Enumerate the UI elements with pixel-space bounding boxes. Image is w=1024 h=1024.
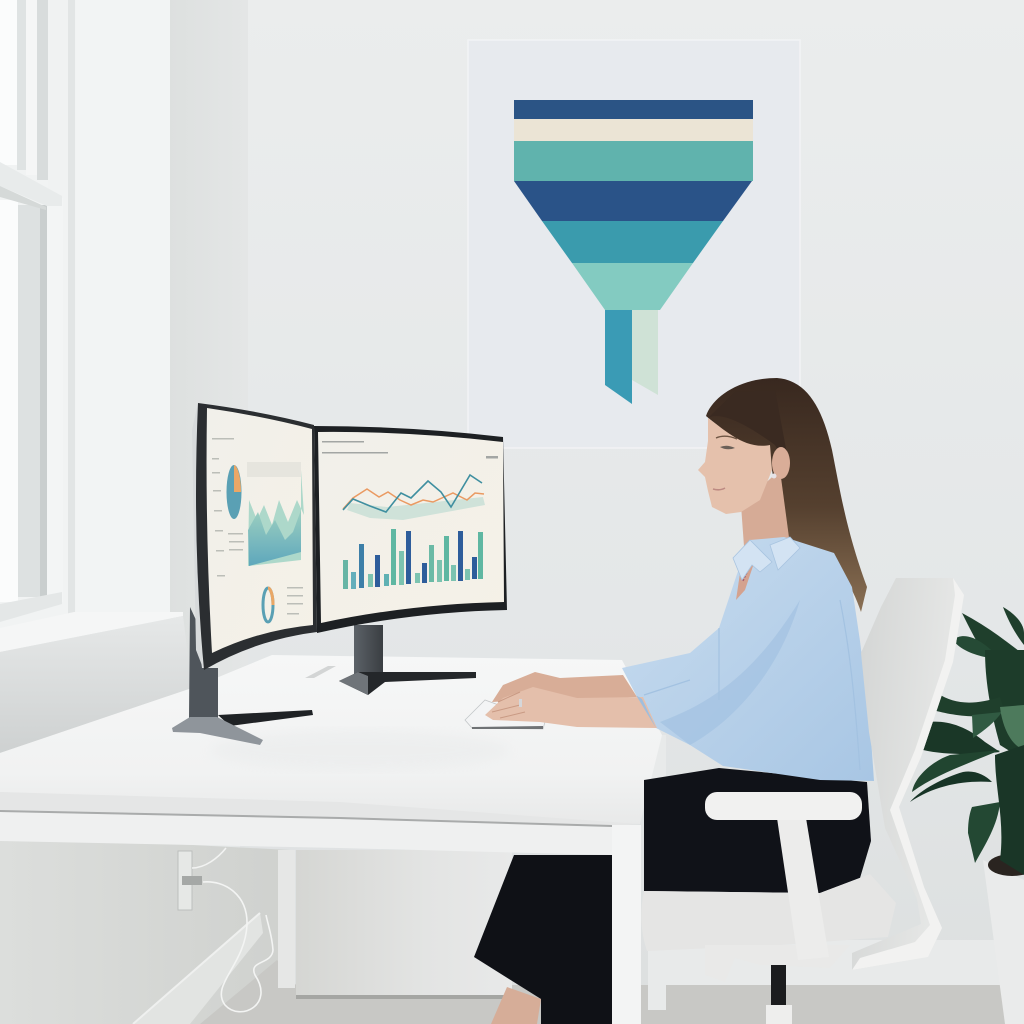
desk note strip	[305, 666, 336, 678]
wall art: funnel poster	[468, 40, 800, 448]
funnel stripe 6	[572, 263, 693, 310]
floor	[200, 960, 1024, 1024]
wall under sill	[0, 616, 192, 753]
bar chart	[343, 529, 483, 589]
window sill	[0, 612, 183, 652]
desk shadow under monitors	[210, 730, 510, 770]
right monitor stand	[339, 625, 476, 695]
plant leaves	[910, 607, 1024, 875]
teal line series	[343, 475, 482, 512]
line chart area	[347, 497, 485, 520]
baseboard	[133, 913, 1000, 1024]
desk back leg	[648, 735, 666, 1010]
funnel stem right	[632, 310, 658, 395]
armrest pad	[705, 792, 862, 820]
left monitor	[172, 403, 317, 745]
eye, brow and mouth	[713, 436, 737, 490]
ankle	[491, 987, 541, 1024]
ear	[772, 447, 790, 479]
shirt neckline and necklace	[736, 553, 755, 600]
back wall	[240, 0, 1024, 1024]
funnel stripe 3	[514, 141, 753, 181]
face	[698, 418, 772, 514]
keyboard	[465, 700, 545, 729]
donut chart	[263, 588, 273, 622]
chair back rim	[852, 578, 964, 970]
hair sweep at temple	[708, 390, 790, 470]
chart header	[247, 462, 301, 477]
left monitor bezel	[196, 403, 317, 670]
chair	[641, 578, 964, 1024]
wall below desk	[0, 835, 290, 1024]
far forearm and hand	[492, 672, 637, 702]
trousers lower leg	[474, 855, 612, 1024]
funnel stripe 1	[514, 100, 753, 119]
funnel stripe 5	[542, 221, 723, 263]
neck	[741, 470, 790, 560]
shirt body	[622, 537, 874, 781]
trousers seated	[644, 768, 871, 893]
earring	[772, 474, 776, 478]
left monitor back edge	[192, 403, 203, 668]
right monitor	[314, 426, 507, 695]
woman	[465, 378, 874, 1024]
left wall corner	[168, 0, 248, 700]
funnel stem left	[605, 310, 632, 404]
cabinet under desk	[278, 850, 512, 999]
orange line series	[343, 489, 484, 509]
hair back	[706, 378, 867, 612]
chair seat	[641, 874, 896, 951]
wall outlet and cable	[178, 848, 273, 1012]
desk top	[0, 655, 662, 824]
finger lines	[492, 692, 525, 718]
right monitor bezel	[314, 426, 507, 633]
left monitor screen	[207, 408, 313, 653]
ring	[519, 699, 522, 707]
window reveal	[72, 0, 170, 625]
left screen sidebar	[212, 438, 303, 614]
pie chart	[226, 465, 242, 519]
chair mechanism	[705, 945, 850, 982]
collar	[733, 537, 800, 580]
screen toolbar lines	[322, 441, 498, 458]
plant soil	[988, 854, 1024, 876]
area chart	[248, 470, 304, 566]
left monitor stand	[172, 607, 313, 745]
plant pot	[983, 860, 1024, 1024]
chair column	[771, 965, 786, 1007]
near forearm and hand	[485, 687, 657, 728]
plant	[910, 607, 1024, 1024]
funnel stripe 2	[514, 119, 753, 141]
desk front leg	[612, 825, 641, 1024]
funnel stripe 4	[514, 181, 752, 221]
window	[0, 0, 76, 628]
shirt cuff shading	[636, 695, 656, 728]
desk front edge	[0, 792, 640, 826]
sleeve fold shading	[660, 600, 800, 745]
armrest post	[777, 818, 829, 960]
desk front apron	[0, 812, 612, 855]
chair back	[852, 578, 964, 970]
right monitor screen	[318, 432, 504, 623]
